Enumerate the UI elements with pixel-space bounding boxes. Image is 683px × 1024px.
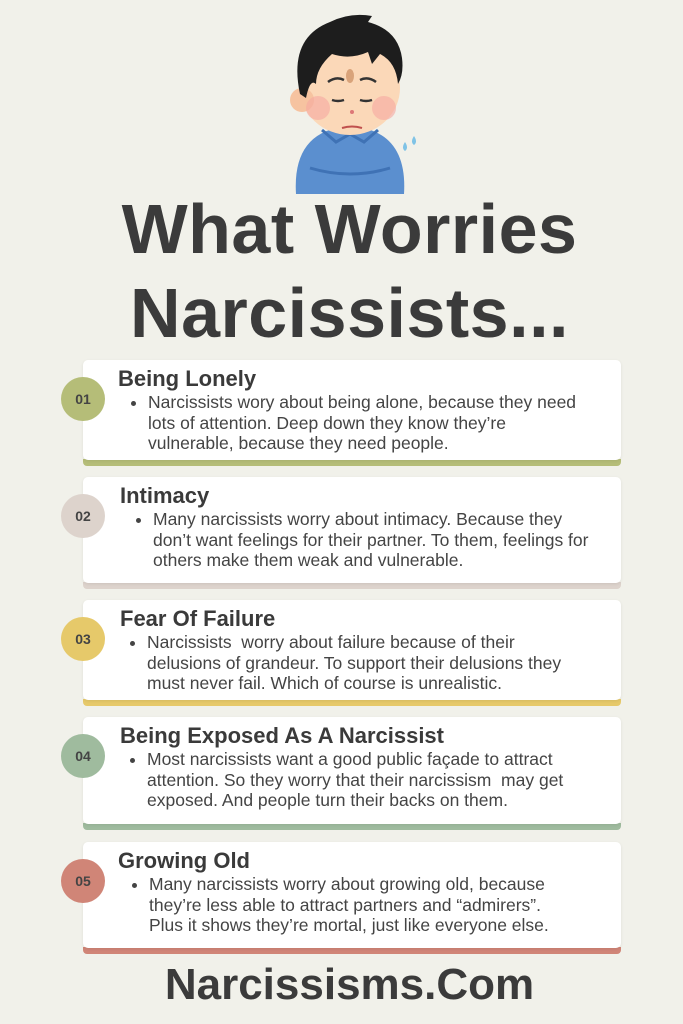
icon: circle 01: 01 bbox=[75, 391, 91, 407]
text block: Most narcissists want a good public façade to attract attention. So they worry that their narcissism may get exposed. And people turn their backs on them. bbox=[147, 749, 563, 810]
panel: being lonely bbox=[83, 360, 621, 460]
panel: growing old bbox=[83, 842, 621, 948]
icon: circle 02: 02 bbox=[75, 508, 91, 524]
heading: Fear Of Failure bbox=[120, 606, 275, 631]
text block: Many narcissists worry about growing old, because they’re less able to attract partners and “admirers”. Plus it shows they’re mortal, just like everyone else. bbox=[149, 874, 549, 935]
icon: circle 02 bbox=[61, 494, 105, 538]
icon: circle 03 bbox=[61, 617, 105, 661]
heading: Intimacy bbox=[120, 483, 209, 508]
footer: Narcissisms.Com bbox=[165, 960, 534, 1009]
icon: worried man bbox=[290, 14, 416, 194]
heading: Growing Old bbox=[118, 848, 250, 873]
title: Narcissists... bbox=[130, 274, 569, 352]
text block: Many narcissists worry about intimacy. Because they don’t want feelings for their partner. To them, feelings for others make them weak and vulnerable. bbox=[153, 509, 588, 570]
icon: circle 04: 04 bbox=[75, 748, 91, 764]
text block: Narcissists worry about failure because of their delusions of grandeur. To support their delusions they must never fail. Which of course is unrealistic. bbox=[147, 632, 561, 693]
icon: circle 05: 05 bbox=[75, 873, 91, 889]
title bbox=[122, 190, 577, 352]
heading: Being Exposed As A Narcissist bbox=[120, 723, 444, 748]
text block: Narcissists wory about being alone, because they need lots of attention. Deep down they know they’re vulnerable, because they need people. bbox=[148, 392, 576, 453]
icon: circle 04 bbox=[61, 734, 105, 778]
icon: circle 03: 03 bbox=[75, 631, 91, 647]
panel: fear of failure bbox=[83, 600, 621, 700]
panel: being exposed bbox=[83, 717, 621, 824]
icon: circle 05 bbox=[61, 859, 105, 903]
title: What Worries bbox=[122, 190, 577, 268]
heading: Being Lonely bbox=[118, 366, 256, 391]
panel: intimacy bbox=[83, 477, 621, 583]
icon: circle 01 bbox=[61, 377, 105, 421]
